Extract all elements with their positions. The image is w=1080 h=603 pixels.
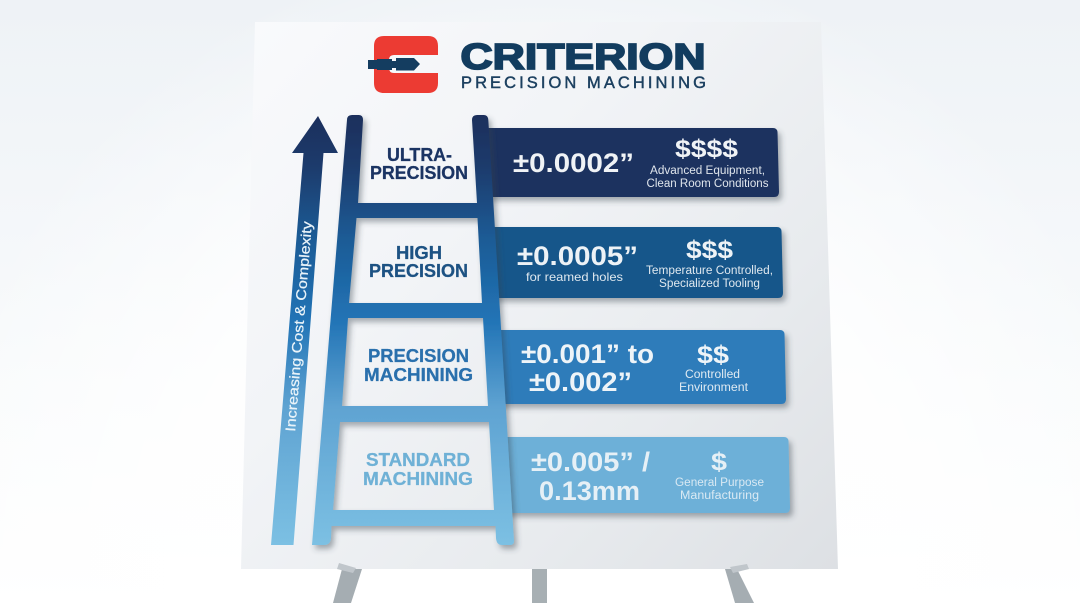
requirements: Environment [679, 382, 749, 394]
arrow: increasing cost and complexity [271, 116, 338, 545]
tolerance: ±0.005” / [531, 447, 651, 477]
requirements [646, 165, 769, 190]
label: high precision [369, 243, 468, 281]
cost: $$ [697, 341, 729, 369]
requirements: Advanced Equipment, [650, 165, 765, 177]
label: ultra-precision [370, 145, 468, 183]
logo: criterion [368, 36, 706, 93]
label: high precision: HIGH [396, 243, 442, 263]
requirements: Temperature Controlled, [646, 265, 773, 277]
tolerance: ±0.0002” [513, 148, 634, 178]
requirements [679, 369, 749, 394]
requirements: General Purpose [675, 477, 764, 489]
bar: high precision [490, 227, 783, 298]
tolerance [531, 447, 651, 506]
label: precision machining [364, 346, 473, 385]
tolerance: ±0.002” [529, 367, 632, 397]
bar: ultra-precision [480, 128, 779, 197]
cost: $ [711, 448, 727, 476]
board panel [241, 22, 838, 569]
requirements: Controlled [685, 369, 740, 381]
tolerance note: for reamed holes [526, 270, 623, 284]
requirements: Manufacturing [680, 490, 759, 502]
label: high precision: PRECISION [369, 261, 468, 281]
wordmark: CRITERION [460, 36, 706, 77]
cost: $$$$ [675, 135, 738, 163]
label: standard machining: STANDARD [366, 450, 470, 470]
requirements: Clean Room Conditions [646, 178, 769, 190]
tagline: PRECISION MACHINING [461, 74, 706, 92]
label: precision machining: MACHINING [364, 365, 473, 385]
easel legs [333, 563, 754, 603]
bar: precision machining [495, 330, 786, 404]
tolerance: ±0.0005” [517, 241, 638, 271]
ladder [312, 115, 514, 545]
label: ultra-precision: ULTRA- [387, 145, 452, 165]
tolerance: 0.13mm [539, 476, 640, 506]
cost: $$$ [686, 236, 733, 264]
tolerance [521, 339, 654, 397]
requirements [675, 477, 764, 502]
icon: red C with spindle [368, 36, 438, 93]
requirements: Specialized Tooling [659, 278, 760, 290]
label: precision machining: PRECISION [368, 346, 469, 366]
tolerance: ±0.001” to [521, 339, 654, 369]
arrow label: Increasing Cost & Complexity [282, 221, 315, 432]
label: standard machining [363, 450, 473, 489]
requirements [646, 265, 773, 290]
label: ultra-precision: PRECISION [370, 163, 468, 183]
bar: standard machining [500, 437, 790, 513]
label: standard machining: MACHINING [363, 469, 473, 489]
